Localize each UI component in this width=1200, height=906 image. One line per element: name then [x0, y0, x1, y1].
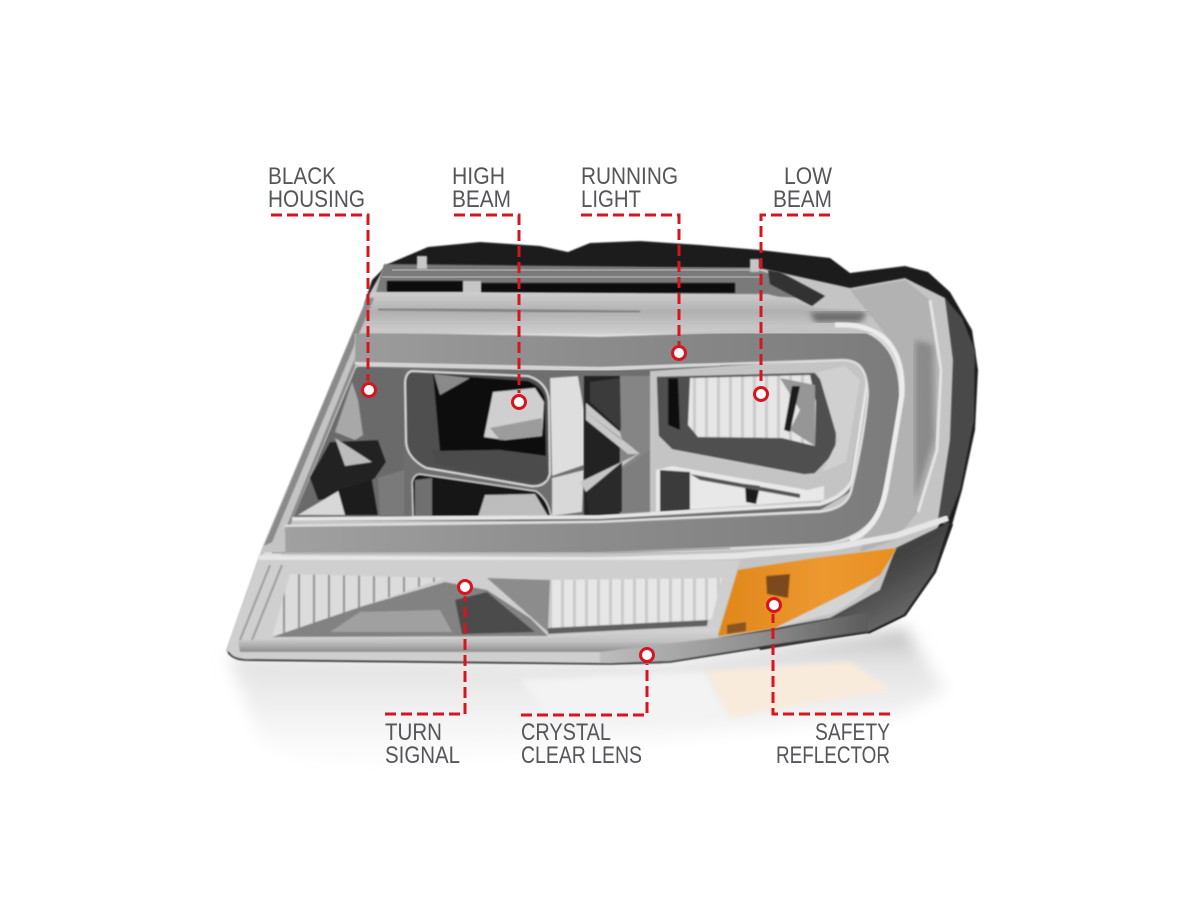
center chrome cross	[580, 376, 652, 516]
right clear corner	[850, 280, 941, 552]
low beam bright reflector	[688, 375, 816, 446]
turn signal ribbed reflector	[272, 574, 445, 637]
center chrome diagonals	[586, 403, 640, 454]
textured upper band	[360, 292, 870, 336]
callout: black housing: HOUSING	[268, 186, 365, 213]
callout: black housing	[268, 163, 376, 396]
chrome post	[550, 376, 584, 476]
right dark side strip	[938, 298, 975, 526]
amber white corner	[775, 578, 878, 628]
callout: safety reflector	[768, 598, 890, 769]
center lower grey	[586, 462, 622, 514]
interior lower chrome line	[292, 378, 868, 519]
silver left edge strips	[264, 298, 374, 546]
right silver panel	[818, 366, 860, 472]
high beam chrome reflection	[484, 388, 544, 440]
amber dark patch	[766, 574, 790, 598]
callout: running light	[581, 163, 686, 360]
interior base	[292, 358, 872, 522]
lower low beam segment	[656, 466, 824, 512]
seam shadow	[272, 548, 730, 553]
left outer trim	[228, 552, 282, 651]
center spike	[580, 453, 640, 492]
clear ribbed block	[550, 578, 722, 628]
black lower right housing	[720, 522, 950, 648]
light bar tube	[285, 344, 884, 542]
high beam upper light patch	[434, 374, 470, 395]
dark seam on upper band	[378, 309, 640, 312]
high beam black opening	[433, 374, 546, 456]
second high beam segment	[412, 470, 584, 517]
right lower band	[600, 612, 868, 663]
callout: running light: RUNNING	[581, 163, 678, 190]
clear lens body	[226, 268, 965, 658]
dark spot on upper band	[810, 312, 868, 322]
callout: safety reflector: REFLECTOR	[776, 742, 890, 769]
lens seam	[258, 518, 948, 560]
amber reflector	[718, 548, 897, 636]
low beam chrome surround	[650, 358, 866, 514]
turn signal lens	[226, 560, 868, 664]
left trim lines	[240, 565, 282, 640]
reflection under headlight	[228, 628, 945, 770]
center upper dark panel	[590, 378, 621, 430]
low beam reflector frame	[656, 366, 860, 512]
callout: high beam: BEAM	[452, 186, 511, 213]
top strip light lines	[382, 270, 760, 277]
bottom lens edge	[228, 632, 868, 664]
center grey column	[620, 376, 652, 514]
chrome upper line of light bar	[358, 364, 720, 370]
callout: turn signal: SIGNAL	[385, 742, 460, 769]
callout: crystal clear lens	[521, 648, 654, 769]
callout: high beam	[452, 163, 526, 408]
center dark recess	[584, 376, 622, 516]
high beam reflector frame	[405, 371, 550, 486]
carbon lower band	[432, 450, 547, 483]
callout: low beam: BEAM	[773, 186, 832, 213]
lower chrome band	[238, 628, 716, 652]
clips	[417, 256, 759, 294]
callout: crystal clear lens: CLEAR LENS	[521, 742, 642, 769]
callout: running light: LIGHT	[581, 186, 641, 213]
callout: high beam: HIGH	[452, 163, 505, 190]
headlight assembly	[226, 241, 978, 664]
interior left reflector	[296, 368, 404, 515]
right darker inner streak	[915, 340, 934, 500]
callout: turn signal: TURN	[385, 719, 442, 746]
callout: safety reflector: SAFETY	[815, 719, 890, 746]
light bar outer chrome	[835, 325, 902, 540]
black rear housing	[364, 241, 978, 650]
light bar tube outline	[285, 344, 884, 542]
right chrome edge	[918, 300, 941, 512]
callout: crystal clear lens: CRYSTAL	[521, 719, 611, 746]
callout: turn signal	[385, 580, 472, 769]
callout: black housing: BLACK	[268, 163, 336, 190]
callout: low beam: LOW	[784, 163, 832, 190]
callout: low beam	[754, 163, 832, 400]
upper top strip	[375, 264, 810, 298]
lower housing outer edge	[868, 524, 952, 633]
left inner dark line	[286, 350, 360, 532]
top vent slots	[387, 270, 825, 306]
turn signal dark lens	[272, 582, 548, 637]
